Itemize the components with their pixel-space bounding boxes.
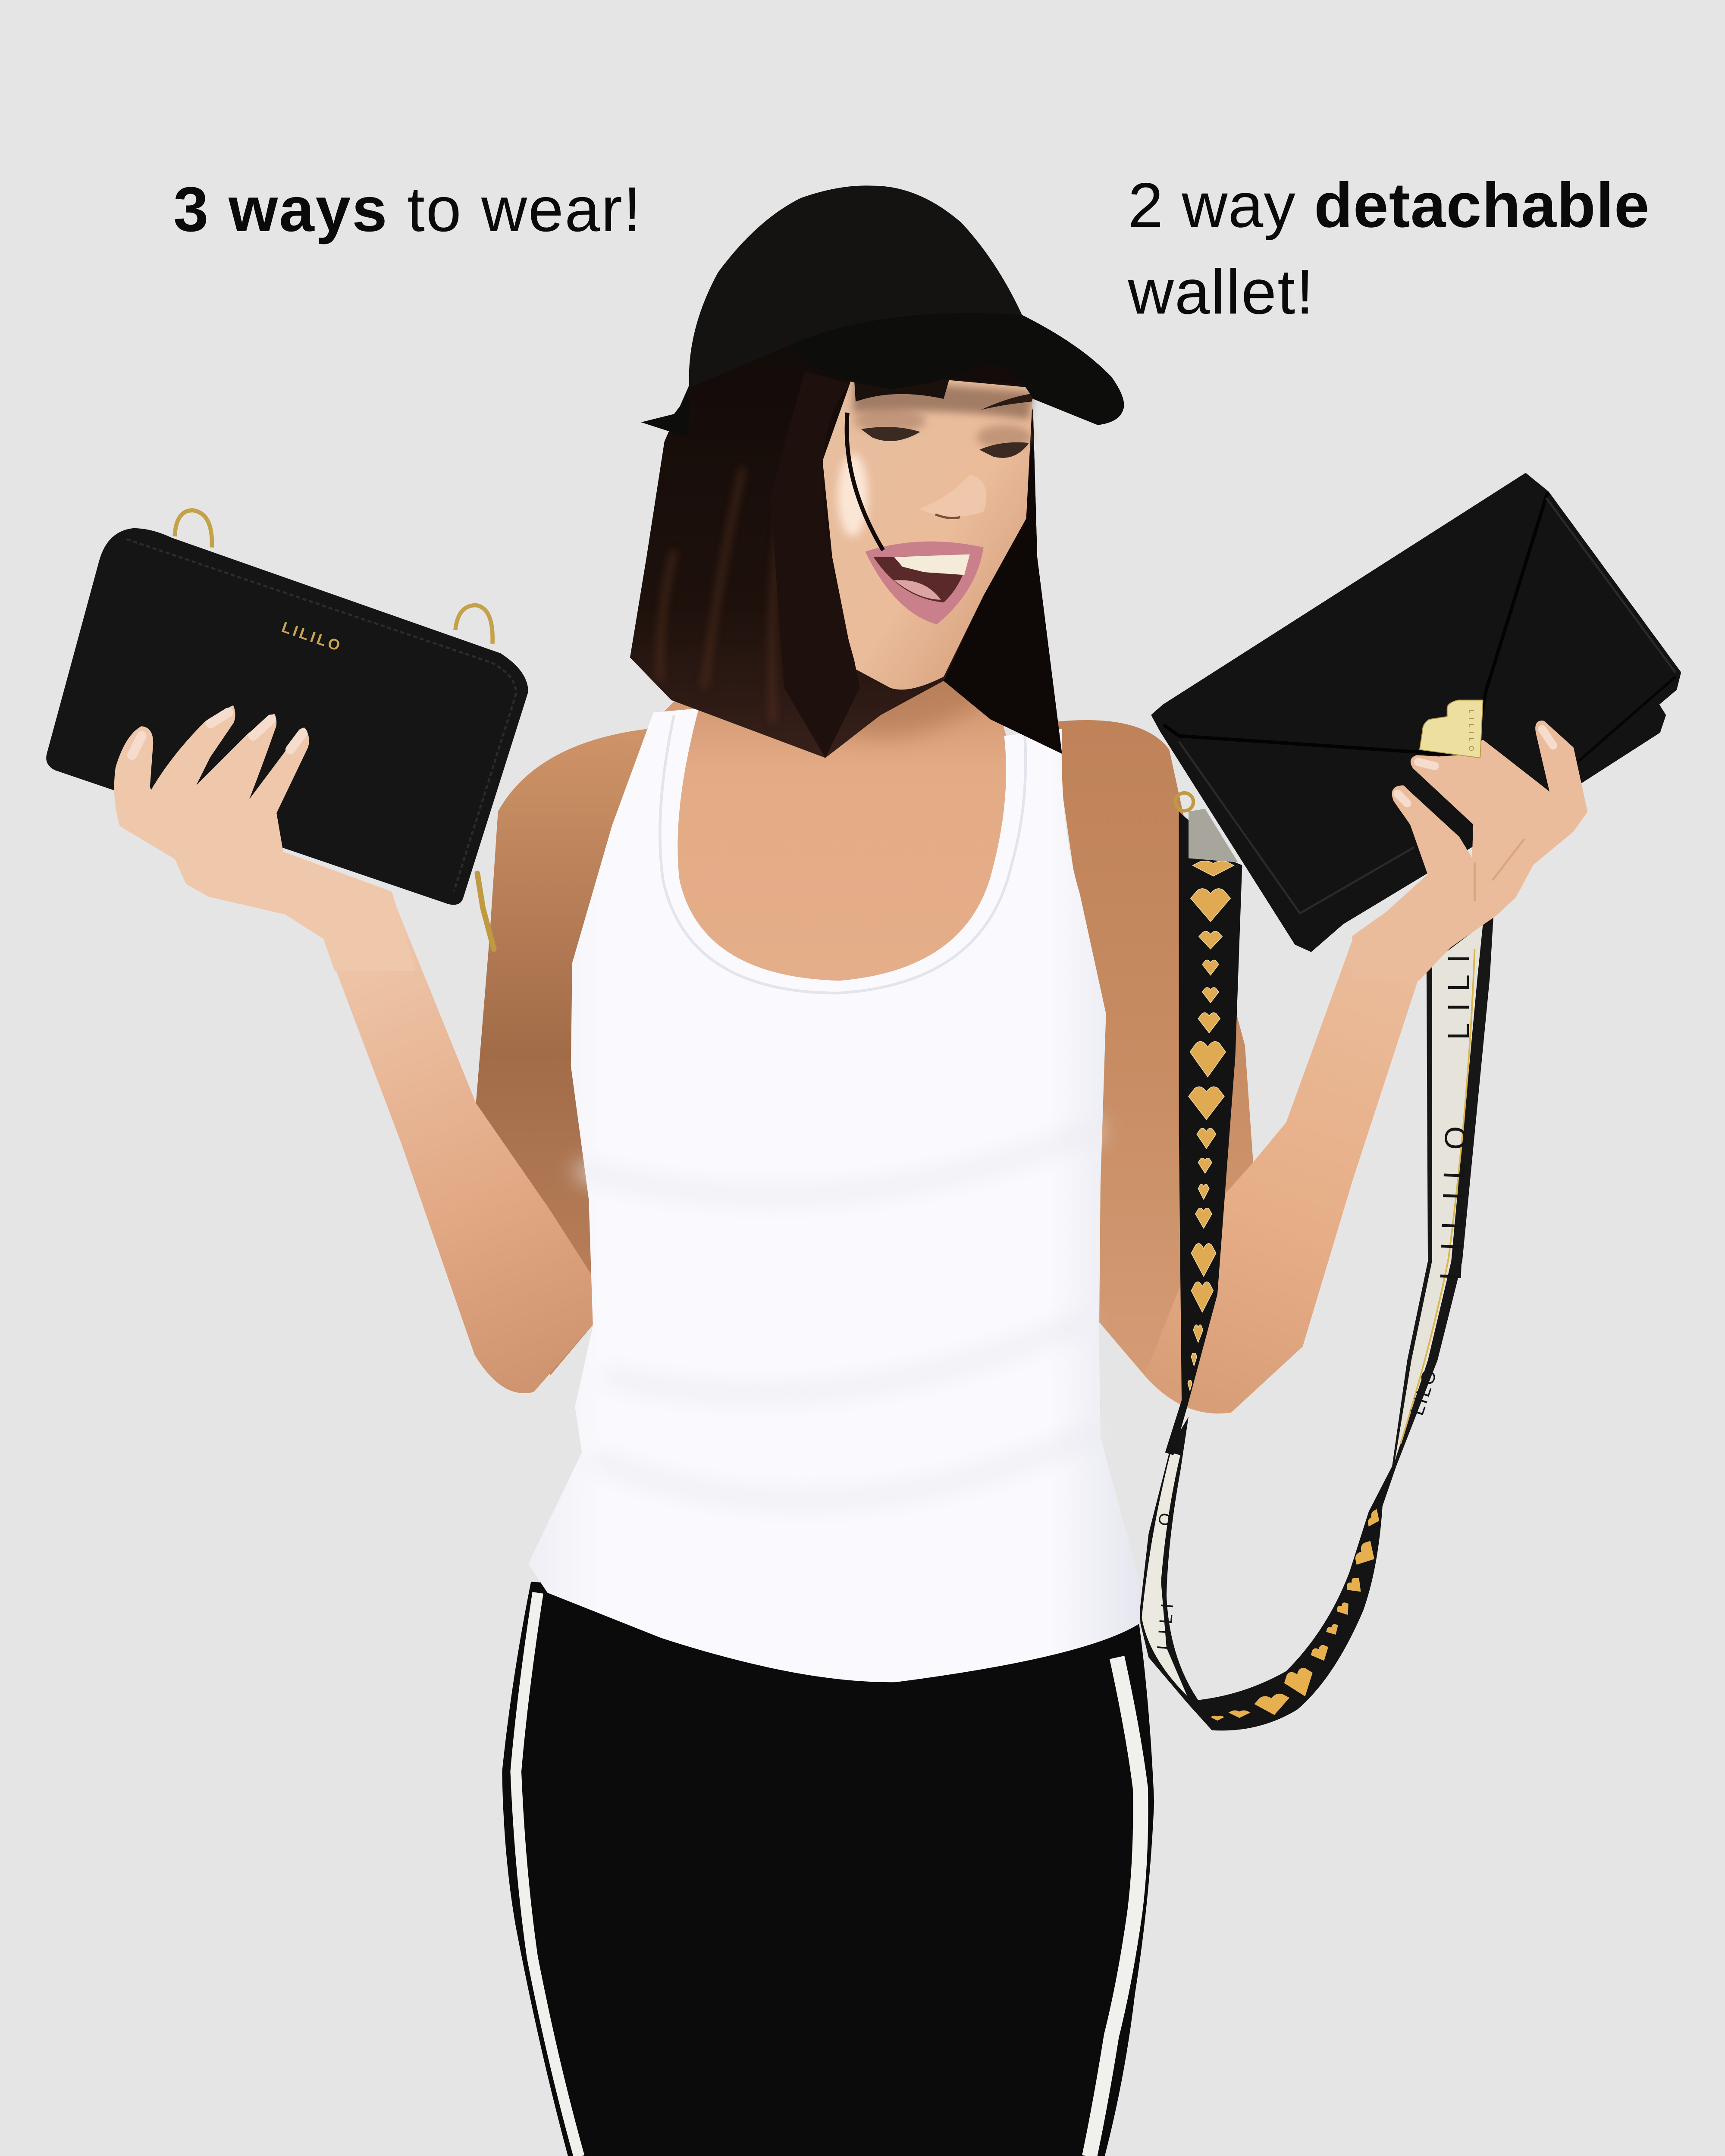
heading: 2 way detachable wallet xyxy=(1128,170,1650,327)
tank neckline trim xyxy=(660,715,1026,993)
hearts xyxy=(1188,861,1234,1391)
nose xyxy=(919,474,986,517)
strap logo text: LILO xyxy=(1406,1367,1441,1418)
arm: right forearm xyxy=(1145,937,1418,1413)
strap logo text: LILILO xyxy=(1433,1125,1473,1281)
bangs xyxy=(854,379,949,401)
strap logo text: O xyxy=(1155,1511,1175,1527)
zip pull xyxy=(477,874,494,949)
teeth xyxy=(894,554,970,575)
nails xyxy=(132,712,303,755)
eye shadow xyxy=(854,408,926,433)
leggings xyxy=(502,1582,1154,2156)
tank top xyxy=(528,708,1140,1682)
neck and chest xyxy=(578,646,1087,990)
arm: left forearm xyxy=(336,893,594,1393)
hair: front strand xyxy=(770,371,860,758)
cheek highlight xyxy=(838,454,868,536)
legging stripe left xyxy=(516,1593,579,2156)
hair: back xyxy=(630,330,1062,758)
wallet body xyxy=(46,528,528,905)
heading: 2 way detachable wallet: wallet! xyxy=(1128,257,1314,327)
arm: left upper xyxy=(476,729,646,1376)
eye left xyxy=(861,427,920,441)
legging stripe right xyxy=(1089,1658,1141,2156)
strap lower hearts xyxy=(1211,1508,1383,1720)
strap: front xyxy=(1165,793,1242,1455)
nails xyxy=(1398,729,1553,803)
gold clasp xyxy=(1420,700,1483,758)
bag: zip wallet xyxy=(46,510,528,949)
eye right xyxy=(979,442,1029,458)
clasp logo: LILILO xyxy=(1468,710,1475,751)
clutch body xyxy=(1153,474,1680,950)
cap xyxy=(641,185,1124,437)
strap logo text xyxy=(1153,955,1476,1651)
cap visor shade xyxy=(790,313,1124,425)
strap white rising band xyxy=(1395,924,1483,1461)
hand: left xyxy=(116,707,414,970)
heading: 2 way detachable wallet: 2 way detachable xyxy=(1128,170,1650,241)
strap black loop xyxy=(1139,1416,1396,1730)
flap seam xyxy=(1164,492,1548,758)
strap grey end xyxy=(1189,809,1238,862)
hand: right xyxy=(1354,722,1586,979)
hair: right dark side xyxy=(944,411,1062,754)
heading: 3 ways to wear: 3 ways to wear! xyxy=(173,174,641,245)
wallet logo: LILILO xyxy=(279,619,342,654)
cap shell xyxy=(689,185,1124,425)
strap: back loop xyxy=(1139,908,1494,1730)
tank folds xyxy=(578,1128,1101,1500)
strap ring xyxy=(1176,793,1193,811)
finger creases xyxy=(1474,839,1524,901)
hair: highlights xyxy=(660,468,825,729)
front panel stitching xyxy=(1179,741,1414,913)
strap white lower xyxy=(1142,1452,1187,1696)
strap logo text: LILI xyxy=(1442,955,1476,1040)
forehead shadow xyxy=(853,378,1033,420)
ring left xyxy=(175,510,212,548)
strap black rising band xyxy=(1392,908,1494,1466)
bag: envelope clutch xyxy=(1153,474,1680,950)
strap gold line xyxy=(1400,949,1474,1444)
arm: right upper xyxy=(1052,720,1253,1403)
face xyxy=(822,371,1035,689)
ring right xyxy=(455,605,492,644)
strap logo text: LILI xyxy=(1153,1602,1177,1651)
mouth xyxy=(865,542,984,624)
right brow xyxy=(981,393,1035,410)
strap black band xyxy=(1165,812,1242,1455)
neck shadow xyxy=(812,646,1004,737)
cap strap xyxy=(641,392,690,437)
